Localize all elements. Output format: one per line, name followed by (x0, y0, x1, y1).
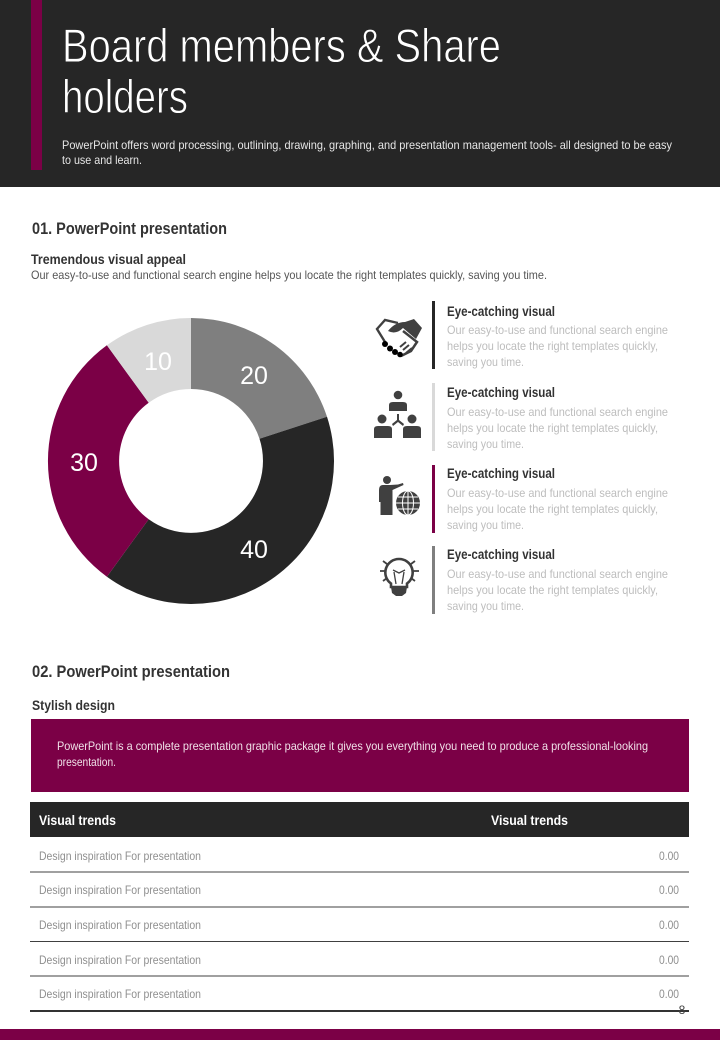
item 1: Our easy-to-use and functional search engine (447, 323, 668, 337)
table header: Visual trends (39, 812, 116, 828)
table row 3: 0.00 (659, 918, 679, 932)
donut chart: 10 (144, 348, 172, 376)
item 2: Eye-catching visual (447, 385, 555, 400)
table row 3: Design inspiration For presentation (39, 918, 201, 932)
title (62, 19, 501, 123)
header panel (0, 0, 720, 187)
table row 3 (30, 918, 689, 942)
item 2: helps you locate the right templates quickly, (447, 421, 658, 435)
item 2: Our easy-to-use and functional search engine (447, 405, 668, 419)
table row 5 (30, 987, 689, 1012)
item 3: Eye-catching visual (447, 466, 555, 481)
item 1: Eye-catching visual (447, 304, 555, 319)
table row 2 (30, 883, 689, 908)
item 3: Our easy-to-use and functional search engine (447, 486, 668, 500)
icon: presenter with globe (379, 476, 422, 516)
section 2 heading: 02. PowerPoint presentation (32, 662, 230, 681)
table row 5: Design inspiration For presentation (39, 987, 201, 1001)
section 1 description: Our easy-to-use and functional search engine helps you locate the right templates quickly, saving you time. (31, 268, 547, 282)
item 4 (380, 546, 668, 614)
title: holders (62, 70, 188, 123)
title: Board members & Share (62, 19, 501, 72)
table (30, 802, 689, 1012)
table row 4 (30, 953, 689, 976)
donut chart: 30 (70, 449, 98, 477)
header description (62, 138, 672, 167)
item 2: saving you time. (447, 437, 524, 451)
item 1: helps you locate the right templates quickly, (447, 339, 658, 353)
callout panel (31, 719, 689, 792)
table row 2: Design inspiration For presentation (39, 883, 201, 897)
table row 5: 0.00 (659, 987, 679, 1001)
item 3 (379, 465, 668, 533)
table row 4: 0.00 (659, 953, 679, 967)
table row 1: Design inspiration For presentation (39, 849, 201, 863)
section 1 heading: 01. PowerPoint presentation (32, 219, 227, 238)
header accent bar (31, 0, 42, 170)
callout panel: presentation. (57, 755, 116, 769)
donut chart: 40 (240, 536, 268, 564)
item 4: Eye-catching visual (447, 547, 555, 562)
item 4: Our easy-to-use and functional search engine (447, 567, 668, 581)
section 1 subheading: Tremendous visual appeal (31, 252, 186, 267)
icon: handshake (377, 319, 422, 357)
table header: Visual trends (491, 812, 568, 828)
table row 1 (30, 849, 689, 872)
section 2 subheading: Stylish design (32, 698, 115, 713)
icon: light bulb (380, 559, 419, 596)
header description: PowerPoint offers word processing, outlining, drawing, graphing, and presentation management tools- all designed to be easy (62, 138, 672, 152)
item 2 (374, 383, 668, 451)
callout panel: PowerPoint is a complete presentation graphic package it gives you everything you need to produce a professional-looking (57, 739, 648, 753)
item 1 (377, 301, 668, 369)
page number: 8 (679, 1003, 686, 1017)
item 1: saving you time. (447, 355, 524, 369)
donut chart (48, 318, 334, 604)
donut chart: 20 (240, 362, 268, 390)
icon: team (374, 391, 421, 438)
item 4: saving you time. (447, 599, 524, 613)
item 3: saving you time. (447, 518, 524, 532)
table row 2: 0.00 (659, 883, 679, 897)
table row 4: Design inspiration For presentation (39, 953, 201, 967)
item 4: helps you locate the right templates quickly, (447, 583, 658, 597)
table header (30, 802, 689, 837)
item 3: helps you locate the right templates quickly, (447, 502, 658, 516)
header description: to use and learn. (62, 153, 142, 167)
footer bar (0, 1029, 720, 1040)
table row 1: 0.00 (659, 849, 679, 863)
